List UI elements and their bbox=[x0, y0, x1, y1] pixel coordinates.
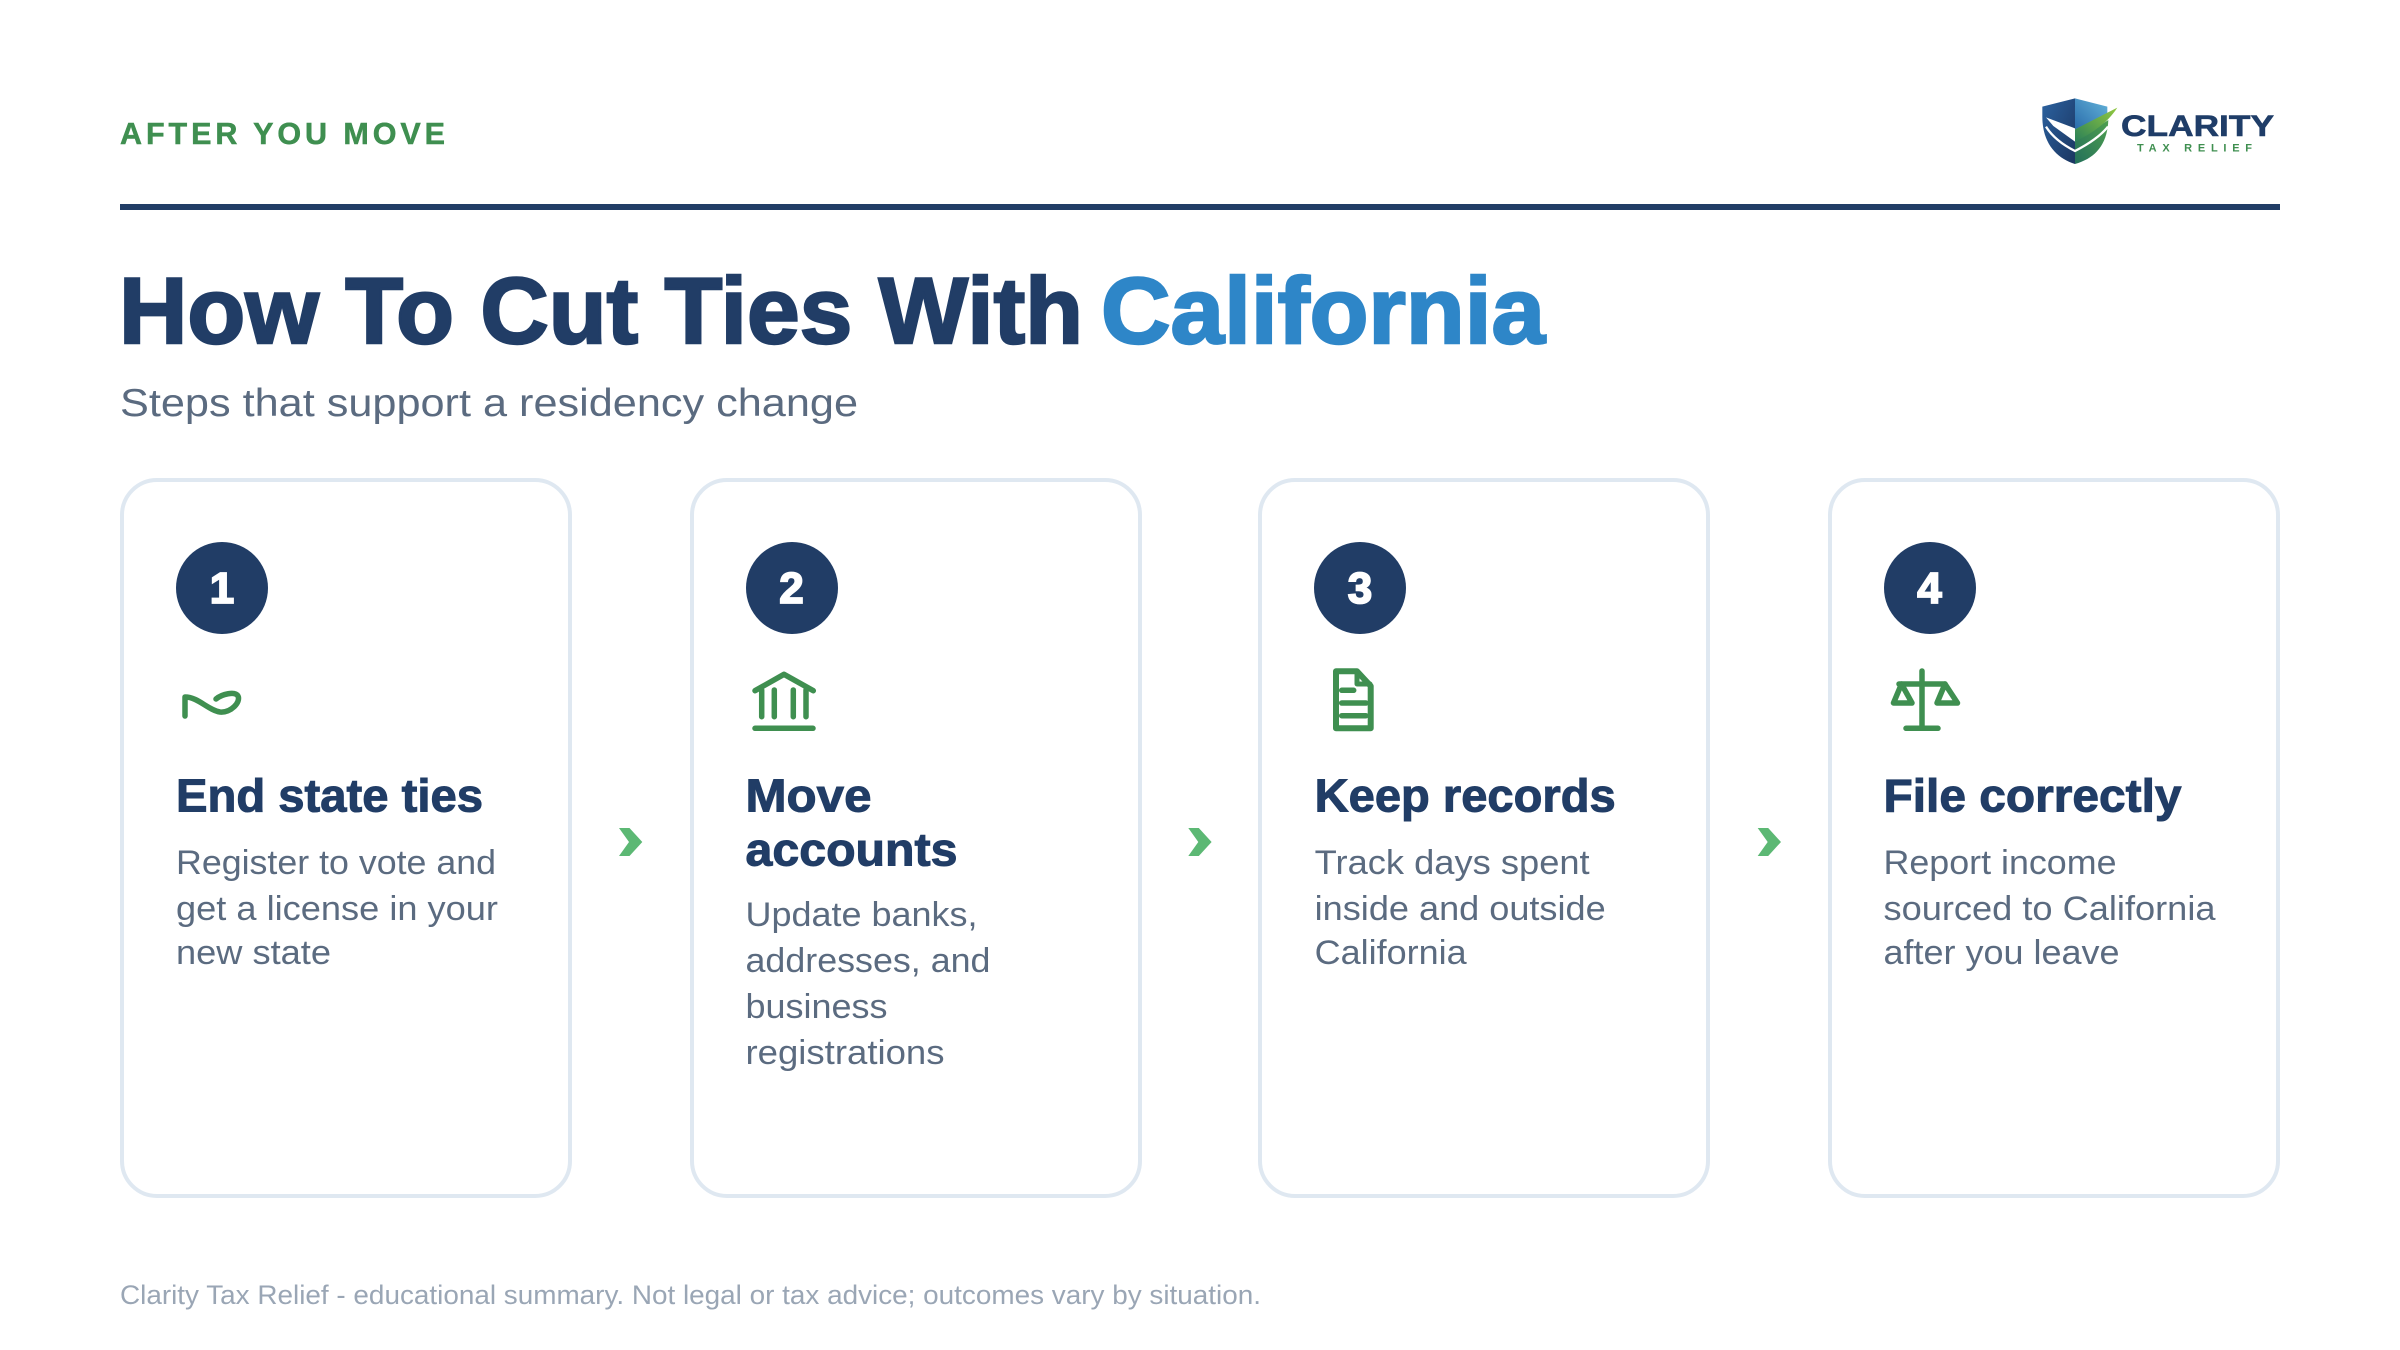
body text: new state bbox=[176, 934, 331, 972]
logo tagline: TAX RELIEF bbox=[2137, 142, 2252, 154]
step number 4: 4 bbox=[1917, 564, 1942, 613]
body text bbox=[746, 896, 990, 1072]
body text: inside and outside bbox=[1315, 890, 1606, 928]
panel: step 1 bbox=[122, 480, 570, 1196]
step number 3 bbox=[1314, 542, 1406, 634]
body text: sourced to California bbox=[1884, 890, 2216, 928]
arrow 1 bbox=[619, 828, 642, 856]
panel: step 2 bbox=[692, 480, 1140, 1196]
body text: after you leave bbox=[1884, 934, 2120, 972]
panel: step 4 bbox=[1830, 480, 2278, 1196]
body text bbox=[176, 844, 498, 972]
step number 4 bbox=[1884, 542, 1976, 634]
icon: scales bbox=[1894, 671, 1958, 728]
arrow 2 bbox=[1188, 828, 1212, 856]
heading: Move accounts bbox=[746, 770, 958, 876]
heading: Keep records: Keep records bbox=[1315, 770, 1616, 822]
eyebrow label: AFTER YOU MOVE bbox=[120, 117, 445, 151]
step number 3: 3 bbox=[1348, 564, 1372, 613]
body text: Register to vote and bbox=[176, 844, 496, 882]
icon: signature bbox=[185, 693, 239, 716]
logo shield bbox=[2042, 98, 2117, 164]
body text: Track days spent bbox=[1315, 844, 1590, 882]
body text: registrations bbox=[746, 1034, 944, 1072]
panel: step 3 bbox=[1260, 480, 1708, 1196]
subtitle: Steps that support a residency change bbox=[120, 382, 858, 425]
icon: document bbox=[1336, 671, 1371, 728]
heading: Move accounts: Move bbox=[746, 770, 872, 822]
title: How To Cut Ties With bbox=[119, 258, 1083, 363]
body text: California bbox=[1315, 934, 1468, 972]
footer disclaimer: Clarity Tax Relief - educational summary. Not legal or tax advice; outcomes vary by situation. bbox=[120, 1280, 1261, 1310]
body text bbox=[1884, 844, 2216, 972]
step number 1 bbox=[176, 542, 268, 634]
logo wordmark: CLARITY bbox=[2121, 110, 2274, 143]
icon: bank bbox=[755, 674, 813, 728]
header rule bbox=[120, 204, 2280, 210]
title bbox=[119, 258, 1546, 363]
body text: Update banks, bbox=[746, 896, 978, 934]
body text: business bbox=[746, 988, 888, 1026]
arrow 3 bbox=[1758, 828, 1781, 856]
body text: addresses, and bbox=[746, 942, 990, 980]
heading: File correctly: File correctly bbox=[1884, 770, 2182, 822]
step number 1: 1 bbox=[210, 564, 234, 613]
title: California bbox=[1101, 258, 1546, 363]
body text bbox=[1315, 844, 1606, 972]
body text: Report income bbox=[1884, 844, 2116, 882]
heading: End state ties: End state ties bbox=[176, 770, 483, 822]
logo: Clarity Tax Relief bbox=[2042, 98, 2274, 164]
step number 2 bbox=[746, 542, 838, 634]
heading: Move accounts: accounts bbox=[746, 824, 958, 876]
body text: get a license in your bbox=[176, 890, 498, 928]
step number 2: 2 bbox=[779, 564, 804, 613]
